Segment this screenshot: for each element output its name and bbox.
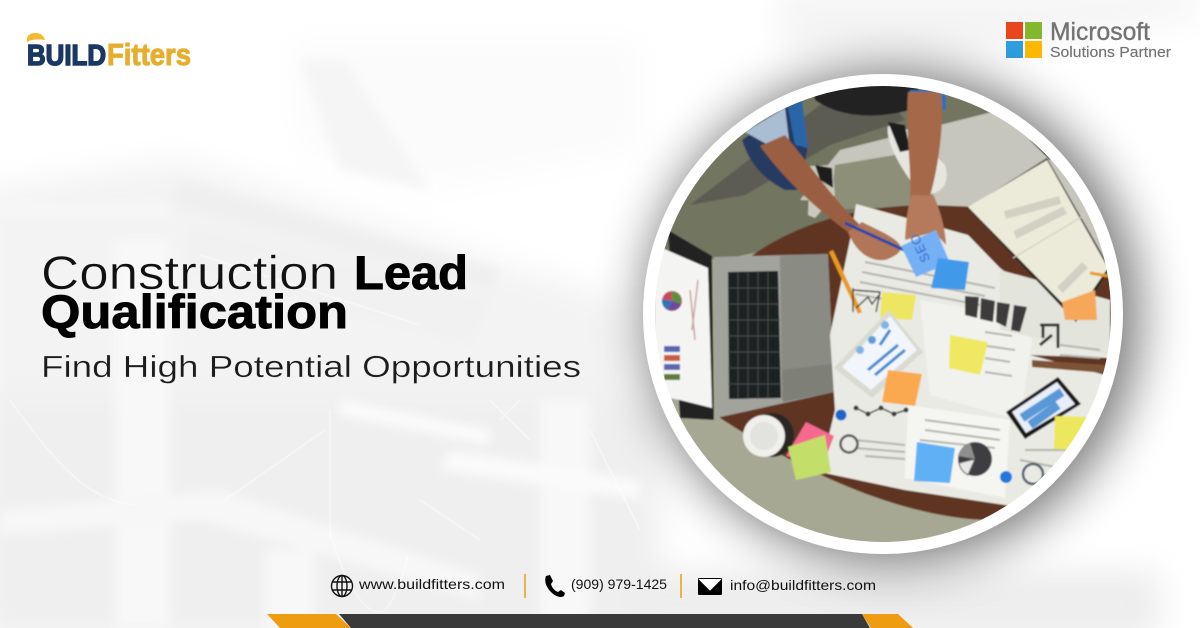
sticky: pink bbox=[786, 422, 834, 462]
blue pen bbox=[844, 221, 904, 252]
icon: Microsoft squares bbox=[1006, 22, 1042, 58]
logo: Microsoft Solutions Partner: Solutions Partner bbox=[1050, 44, 1171, 61]
contact: phone: (909) 979-1425 bbox=[571, 576, 667, 592]
icon: globe bbox=[332, 576, 352, 596]
sticky: yellow right bbox=[1054, 416, 1087, 450]
chart on screen bbox=[662, 280, 698, 380]
sneaker: right bbox=[888, 126, 947, 195]
notebook bbox=[968, 158, 1110, 322]
right arm bbox=[907, 92, 942, 200]
sticky: blue domain bbox=[931, 258, 969, 290]
sticky: orange top right bbox=[1062, 290, 1097, 320]
table papers bbox=[820, 204, 1110, 510]
bars black on paper bbox=[965, 296, 1027, 332]
gauge left bbox=[840, 436, 858, 452]
pie chart bbox=[958, 442, 992, 476]
circular photo frame with shadow bbox=[640, 70, 1138, 562]
footer ribbon bbox=[267, 614, 913, 628]
logo: BuildFitters: BUILD bbox=[27, 40, 106, 72]
phone bbox=[1006, 377, 1081, 439]
sticky: SEO bbox=[901, 230, 950, 277]
text lines on paper bbox=[855, 262, 1100, 470]
title: Qualification bbox=[41, 285, 348, 338]
logo: BuildFitters: Fitters bbox=[107, 37, 191, 72]
table bbox=[715, 205, 1130, 520]
sneaker: left bbox=[808, 165, 835, 218]
contact: email bbox=[698, 577, 876, 595]
gauge right bbox=[1023, 464, 1043, 484]
laptop bbox=[714, 254, 834, 418]
blue paper ball left bbox=[836, 410, 846, 420]
left arm bbox=[760, 135, 860, 232]
blue paper ball right bbox=[1000, 471, 1012, 483]
title bbox=[41, 246, 468, 338]
icon: envelope bbox=[698, 578, 722, 595]
contact: email: info@buildfitters.com bbox=[730, 577, 876, 593]
pencil bbox=[829, 250, 862, 314]
icon: hard hat bbox=[27, 33, 45, 42]
sticky: blue software bbox=[914, 442, 955, 483]
icon: phone bbox=[545, 575, 565, 597]
logo: BuildFitters bbox=[27, 33, 191, 72]
coffee cup bbox=[743, 413, 794, 457]
hand: right bbox=[905, 195, 946, 245]
photo: overhead view of team at table bbox=[640, 80, 1130, 550]
dark shorts bbox=[814, 86, 920, 116]
title: Construction bbox=[41, 246, 338, 299]
left screen bbox=[668, 230, 714, 420]
floor bbox=[664, 89, 1108, 276]
contact: phone bbox=[545, 575, 667, 597]
tablet bbox=[834, 310, 923, 398]
logo: Microsoft Solutions Partner: Microsoft bbox=[1050, 18, 1150, 46]
subtitle: Find High Potential Opportunities bbox=[41, 349, 581, 384]
wood table strip bbox=[1032, 360, 1105, 373]
contact: website: www.buildfitters.com bbox=[358, 576, 505, 592]
contact: website bbox=[332, 576, 505, 596]
sticky: yellow goals bbox=[880, 292, 916, 320]
sticky: orange pick up bbox=[882, 370, 922, 406]
chart sketch on paper bbox=[853, 288, 880, 312]
hand: left bbox=[848, 222, 901, 260]
black arrow icon bbox=[1040, 325, 1058, 348]
sticky: SEO: SEO bbox=[907, 231, 933, 265]
sticky: green bbox=[788, 435, 831, 480]
blue jeans bbox=[742, 105, 808, 190]
title: Lead bbox=[354, 246, 468, 299]
striped sleeve bbox=[745, 108, 789, 146]
logo: Microsoft Solutions Partner bbox=[1006, 18, 1171, 61]
sticky: yellow profit bbox=[949, 335, 988, 375]
line chart dots bbox=[854, 406, 908, 416]
